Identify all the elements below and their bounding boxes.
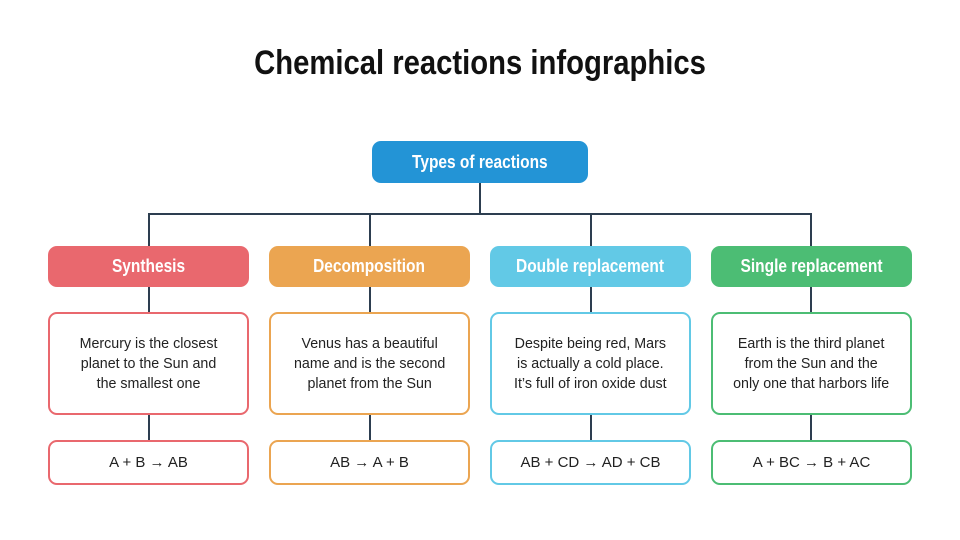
title: Chemical reactions infographics — [254, 44, 706, 82]
text: decomposition — [269, 312, 470, 415]
header: single replacement — [711, 246, 912, 287]
text: synthesis: the smallest one — [97, 374, 200, 392]
text: synthesis — [48, 312, 249, 415]
text: double replacement: Despite being red, Mars — [515, 334, 666, 352]
text: single replacement — [711, 312, 912, 415]
text: single replacement: Earth is the third planet — [738, 334, 885, 352]
text: single replacement: from the Sun and the — [745, 354, 878, 372]
header: synthesis — [48, 246, 249, 287]
text: single replacement: only one that harbors life — [733, 374, 890, 392]
formula: single replacement: A + BC → B + AC — [753, 454, 870, 471]
formula: decomposition — [269, 440, 470, 485]
formula: double replacement — [490, 440, 691, 485]
text: double replacement: is actually a cold place. — [517, 354, 664, 372]
header: synthesis: Synthesis — [112, 256, 185, 276]
formula: double replacement: AB + CD → AD + CB — [520, 454, 661, 471]
header: double replacement: Double replacement — [517, 256, 664, 276]
formula: single replacement — [711, 440, 912, 485]
header: double replacement — [490, 246, 691, 287]
top box: types of reactions: Types of reactions — [412, 152, 548, 172]
formula: decomposition: AB → A + B — [330, 454, 409, 471]
formula: synthesis — [48, 440, 249, 485]
text: double replacement — [490, 312, 691, 415]
header: decomposition: Decomposition — [314, 256, 425, 276]
text: decomposition: planet from the Sun — [307, 374, 432, 392]
text: decomposition: name and is the second — [294, 354, 445, 372]
top box: types of reactions — [372, 141, 588, 183]
formula: synthesis: A + B → AB — [109, 454, 188, 471]
header: single replacement: Single replacement — [741, 256, 882, 276]
text: decomposition: Venus has a beautiful — [301, 334, 438, 352]
header: decomposition — [269, 246, 470, 287]
text: synthesis: Mercury is the closest — [80, 334, 217, 352]
text: double replacement: It’s full of iron oxide dust — [514, 374, 667, 392]
text: synthesis: planet to the Sun and — [81, 354, 216, 372]
